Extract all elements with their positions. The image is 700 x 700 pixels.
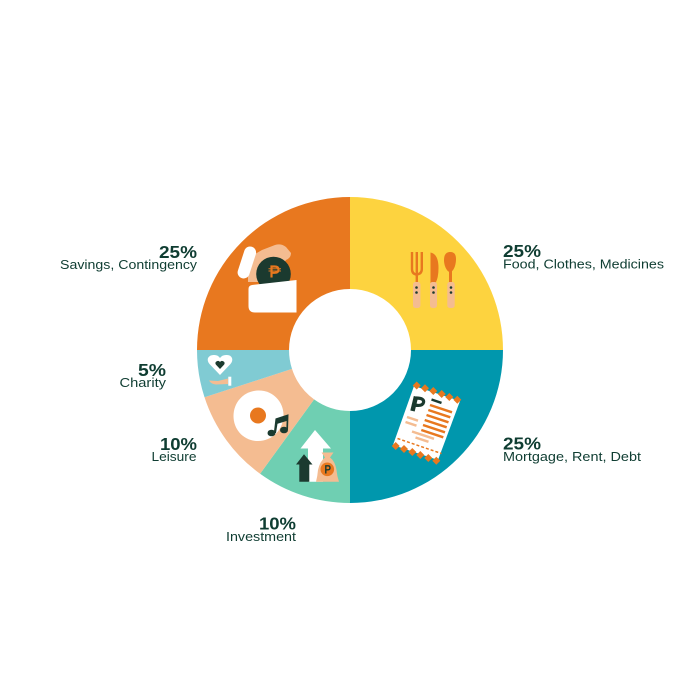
coin (256, 257, 291, 291)
icon: savings hand, coin and wallet (236, 244, 296, 312)
hand (209, 378, 228, 384)
label: charity: 5% (138, 360, 166, 380)
label: charity: Charity (120, 375, 166, 390)
spoon (444, 252, 456, 308)
bag coin (320, 462, 334, 476)
icon: cutlery (412, 252, 456, 308)
receipt peso sign (412, 396, 424, 411)
label: savings (60, 242, 197, 272)
coin peso sign (268, 266, 281, 278)
label: leisure: 10% (160, 434, 197, 454)
hand (248, 244, 291, 282)
segment: charity 5% (197, 350, 292, 397)
music note (268, 414, 288, 436)
money bag (316, 452, 339, 482)
segment: food 25% (350, 197, 503, 350)
receipt lines (398, 400, 452, 454)
label: mortgage (503, 434, 641, 464)
receipt zigzag edges (392, 382, 461, 465)
label: mortgage: Mortgage, Rent, Debt (503, 449, 641, 464)
label: food: 25% (503, 241, 541, 261)
knife (430, 252, 438, 308)
segment: leisure 10% (204, 369, 314, 474)
segment: savings 25% (197, 197, 350, 350)
label: food (503, 241, 664, 272)
icon: investment arrows and money bag (296, 430, 339, 482)
icon: receipt (392, 382, 461, 465)
label: investment: 10% (259, 514, 296, 534)
wallet (248, 280, 296, 312)
thumb (236, 245, 258, 280)
segment: investment 10% (260, 399, 350, 503)
white arrow (300, 430, 331, 482)
fork (412, 252, 422, 308)
label: savings: 25% (159, 242, 197, 262)
icon: leisure egg and music note (234, 390, 288, 441)
label: leisure (152, 434, 197, 464)
donut chart (197, 197, 503, 503)
label: investment: Investment (226, 529, 296, 544)
icon: charity heart and hand (208, 355, 232, 386)
heart (208, 355, 232, 375)
label: charity (120, 360, 166, 390)
label: savings: Savings, Contingency (60, 257, 197, 272)
dark arrow (296, 454, 312, 482)
label: mortgage: 25% (503, 434, 541, 454)
label: leisure: Leisure (152, 449, 196, 464)
egg (234, 390, 284, 441)
label: food: Food, Clothes, Medicines (503, 256, 664, 272)
label: investment (226, 514, 296, 544)
segment: mortgage 25% (350, 350, 503, 503)
